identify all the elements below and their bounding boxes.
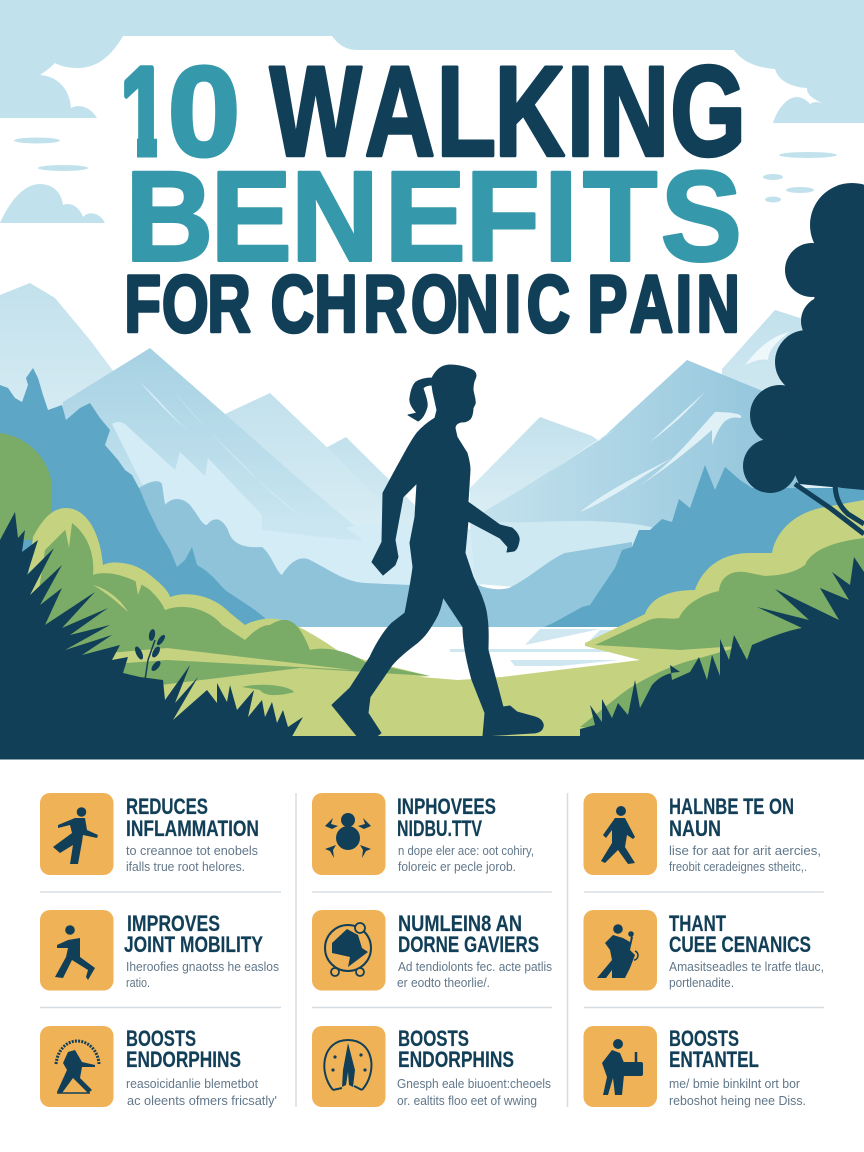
mountains: left range [0,283,480,590]
item: halnbe te on naun: freobit ceradeignes stheitc,. [669,859,807,874]
item: numleing an dorne gaviers: Ad tendiolonts fec. acte patlis [398,959,552,974]
item: thant cuee cenanics: portlenadite. [669,975,734,990]
item: halnbe te on naun: HALNBE TE ON [669,794,794,819]
item: thant cuee cenanics: CUEE CENANICS [669,932,811,957]
item: thant cuee cenanics: THANT [669,911,726,936]
walker silhouette [332,365,543,736]
item: boosts endorphins second: ENDORPHINS [398,1047,514,1072]
item: numleing an dorne gaviers: DORNE GAVIERS [398,932,539,957]
item: improves mobility: INPHOVEES [397,794,496,819]
item: improves joint mobility: Iheroofies gnaotss he easlos [126,959,279,974]
item: boosts endorphins: BOOSTS [126,1026,196,1051]
item: reduces inflammation: REDUCES [126,794,208,819]
dark foreground plants right [580,557,864,740]
title: 0 [168,41,240,183]
ground band [0,736,864,760]
left bushes [0,433,430,700]
mountains: right range [470,310,864,590]
panel: benefits [40,793,824,1108]
forest left [0,368,265,640]
item: boosts endorphins: reasoicidanlie blemetbot [126,1076,258,1091]
item: halnbe te on naun: lise for aat for arit aercies, [669,843,821,858]
item: thant cuee cenanics: Amasitseadles te lratfe tlauc, [669,959,824,974]
item: improves mobility: n dope eler ace: oot cohiry, [398,843,534,858]
item: thant cuee cenanics [584,910,824,990]
title: BENEFITS [125,146,742,288]
dark foreground plants left [0,512,303,740]
item: improves mobility [312,793,534,875]
item: numleing an dorne gaviers: NUMLEIN8 AN [398,911,522,936]
item: boosts endorphins second: or. ealtits floo eet of wwing [397,1093,537,1108]
item: boosts endorphins second: Gnesph eale biuoent:cheoels [397,1076,551,1091]
item: boosts endorphins second: BOOSTS [398,1026,469,1051]
item: boosts entantel: ENTANTEL [669,1047,759,1072]
item: halnbe te on naun [584,793,821,875]
item: improves mobility: NIDBU.TTV [397,816,482,841]
item: reduces inflammation [40,793,259,875]
item: numleing an dorne gaviers: er eodto theorlie/. [397,975,490,990]
item: boosts endorphins: ac oleents ofmers fricsatly' [127,1093,277,1108]
column dividers [40,793,824,1107]
item: reduces inflammation: to creannoe tot enobels [126,843,258,858]
right bushes [580,500,864,730]
item: boosts endorphins second [312,1026,551,1108]
icon: leafy sprig [133,629,166,680]
item: improves joint mobility: JOINT MOBILITY [124,932,263,957]
item: reduces inflammation: INFLAMMATION [126,816,259,841]
item: reduces inflammation: ifalls true root helores. [126,859,245,874]
ground [0,620,864,736]
mid hills left [130,481,430,630]
item: boosts entantel: me/ bmie binkilnt ort bor [669,1076,801,1091]
lake [250,627,770,687]
title: 1 [120,41,168,181]
title: WALKING [270,41,746,184]
item: boosts entantel [584,1026,806,1108]
sky and clouds [0,0,864,223]
item: boosts entantel: reboshot heing nee Diss. [669,1093,806,1108]
item: improves joint mobility: IMPROVES [127,911,220,936]
item: halnbe te on naun: NAUN [669,816,721,841]
item: boosts entantel: BOOSTS [669,1026,739,1051]
title: FOR CHRONIC PAIN [124,259,740,350]
item: numleing an dorne gaviers [312,910,552,990]
item: boosts endorphins: ENDORPHINS [126,1047,241,1072]
item: improves joint mobility: ratio. [126,975,150,990]
item: improves mobility: foloreic er pecle jorob. [398,859,516,874]
item: boosts endorphins [40,1026,277,1108]
hills and forest right [430,465,864,640]
item: improves joint mobility [40,910,279,990]
tree [743,183,864,534]
title [112,41,746,350]
